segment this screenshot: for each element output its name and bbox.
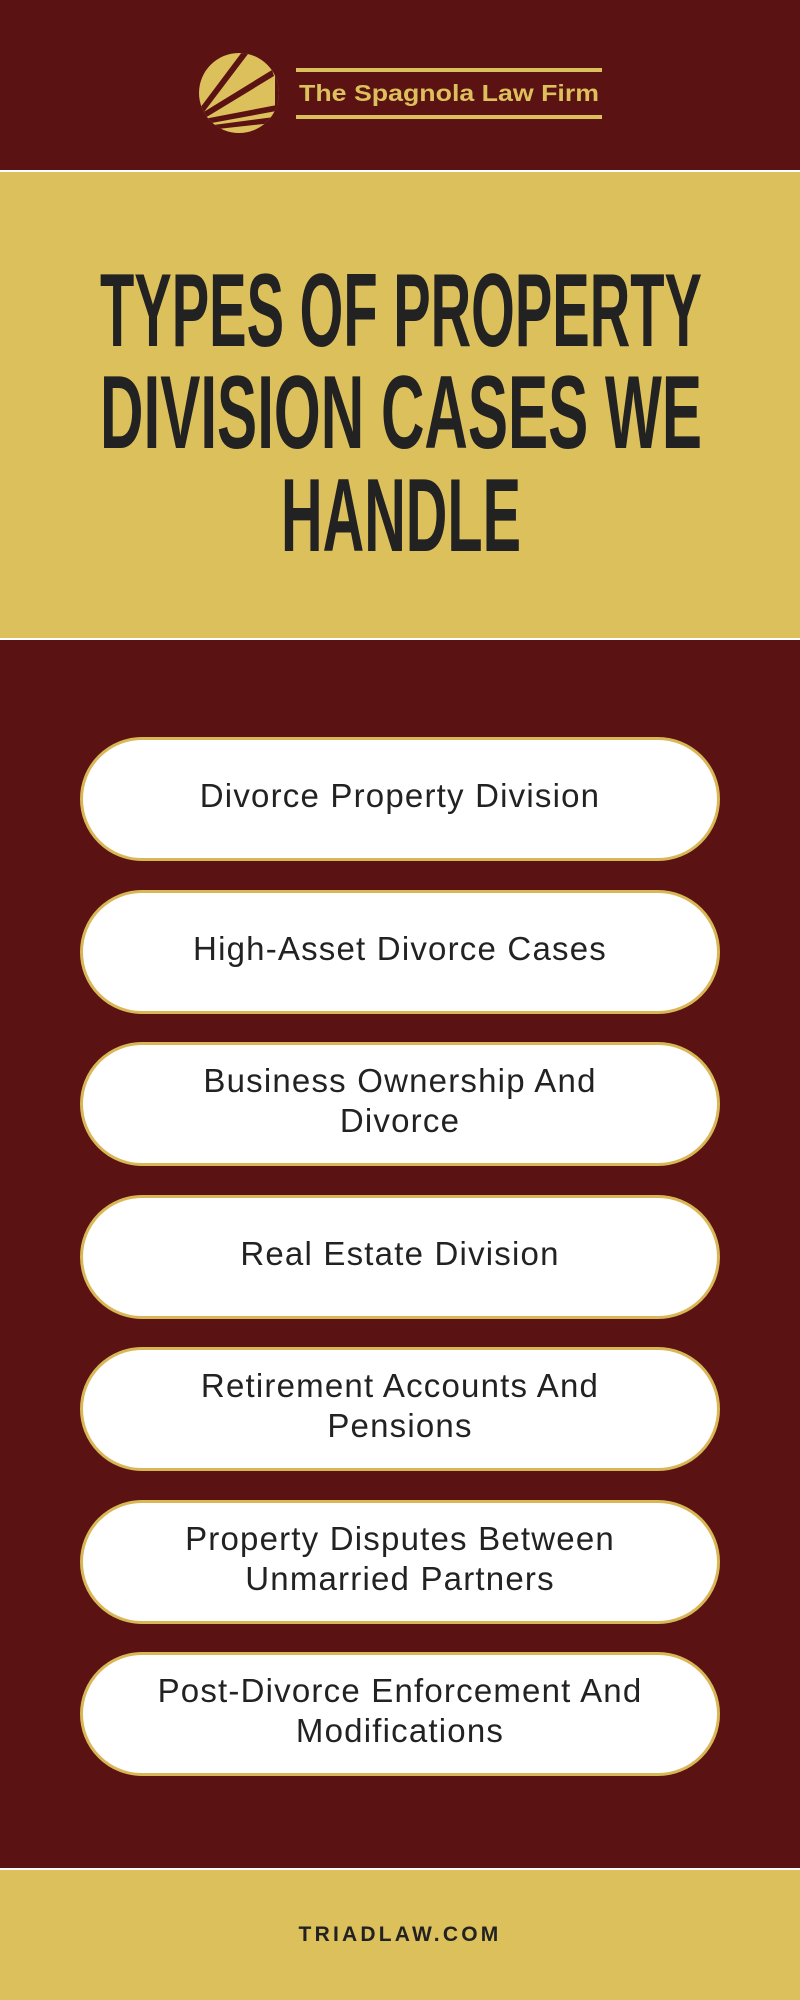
item 3: Business Ownership And <box>203 1062 597 1099</box>
header band <box>0 0 800 170</box>
logo lines <box>296 68 602 119</box>
logo <box>199 53 602 133</box>
footer <box>0 1870 800 2000</box>
item 4: Real Estate Division <box>240 1235 560 1272</box>
logo text: The Spagnola Law Firm <box>299 80 599 106</box>
item 2: High-Asset Divorce Cases <box>193 930 607 967</box>
item 5 <box>80 1347 720 1471</box>
item 7: Post-Divorce Enforcement And <box>158 1672 642 1709</box>
item 5: Pensions <box>327 1407 473 1444</box>
item 1 <box>80 737 720 861</box>
title: HANDLE <box>281 458 521 574</box>
item 7: Modifications <box>296 1712 504 1749</box>
item 1: Divorce Property Division <box>200 777 600 814</box>
item 3: Divorce <box>340 1102 460 1139</box>
item 7 <box>80 1652 720 1776</box>
title <box>100 253 702 574</box>
title band <box>0 172 800 638</box>
item 6: Unmarried Partners <box>245 1560 555 1597</box>
item 4 <box>80 1195 720 1319</box>
item 2 <box>80 890 720 1014</box>
item 5: Retirement Accounts And <box>201 1367 599 1404</box>
item 6: Property Disputes Between <box>185 1520 615 1557</box>
item 3 <box>80 1042 720 1166</box>
footer url: TRIADLAW.COM <box>299 1923 501 1946</box>
icon: sunburst <box>199 53 279 133</box>
item 6 <box>80 1500 720 1624</box>
list of case types <box>0 640 800 1868</box>
